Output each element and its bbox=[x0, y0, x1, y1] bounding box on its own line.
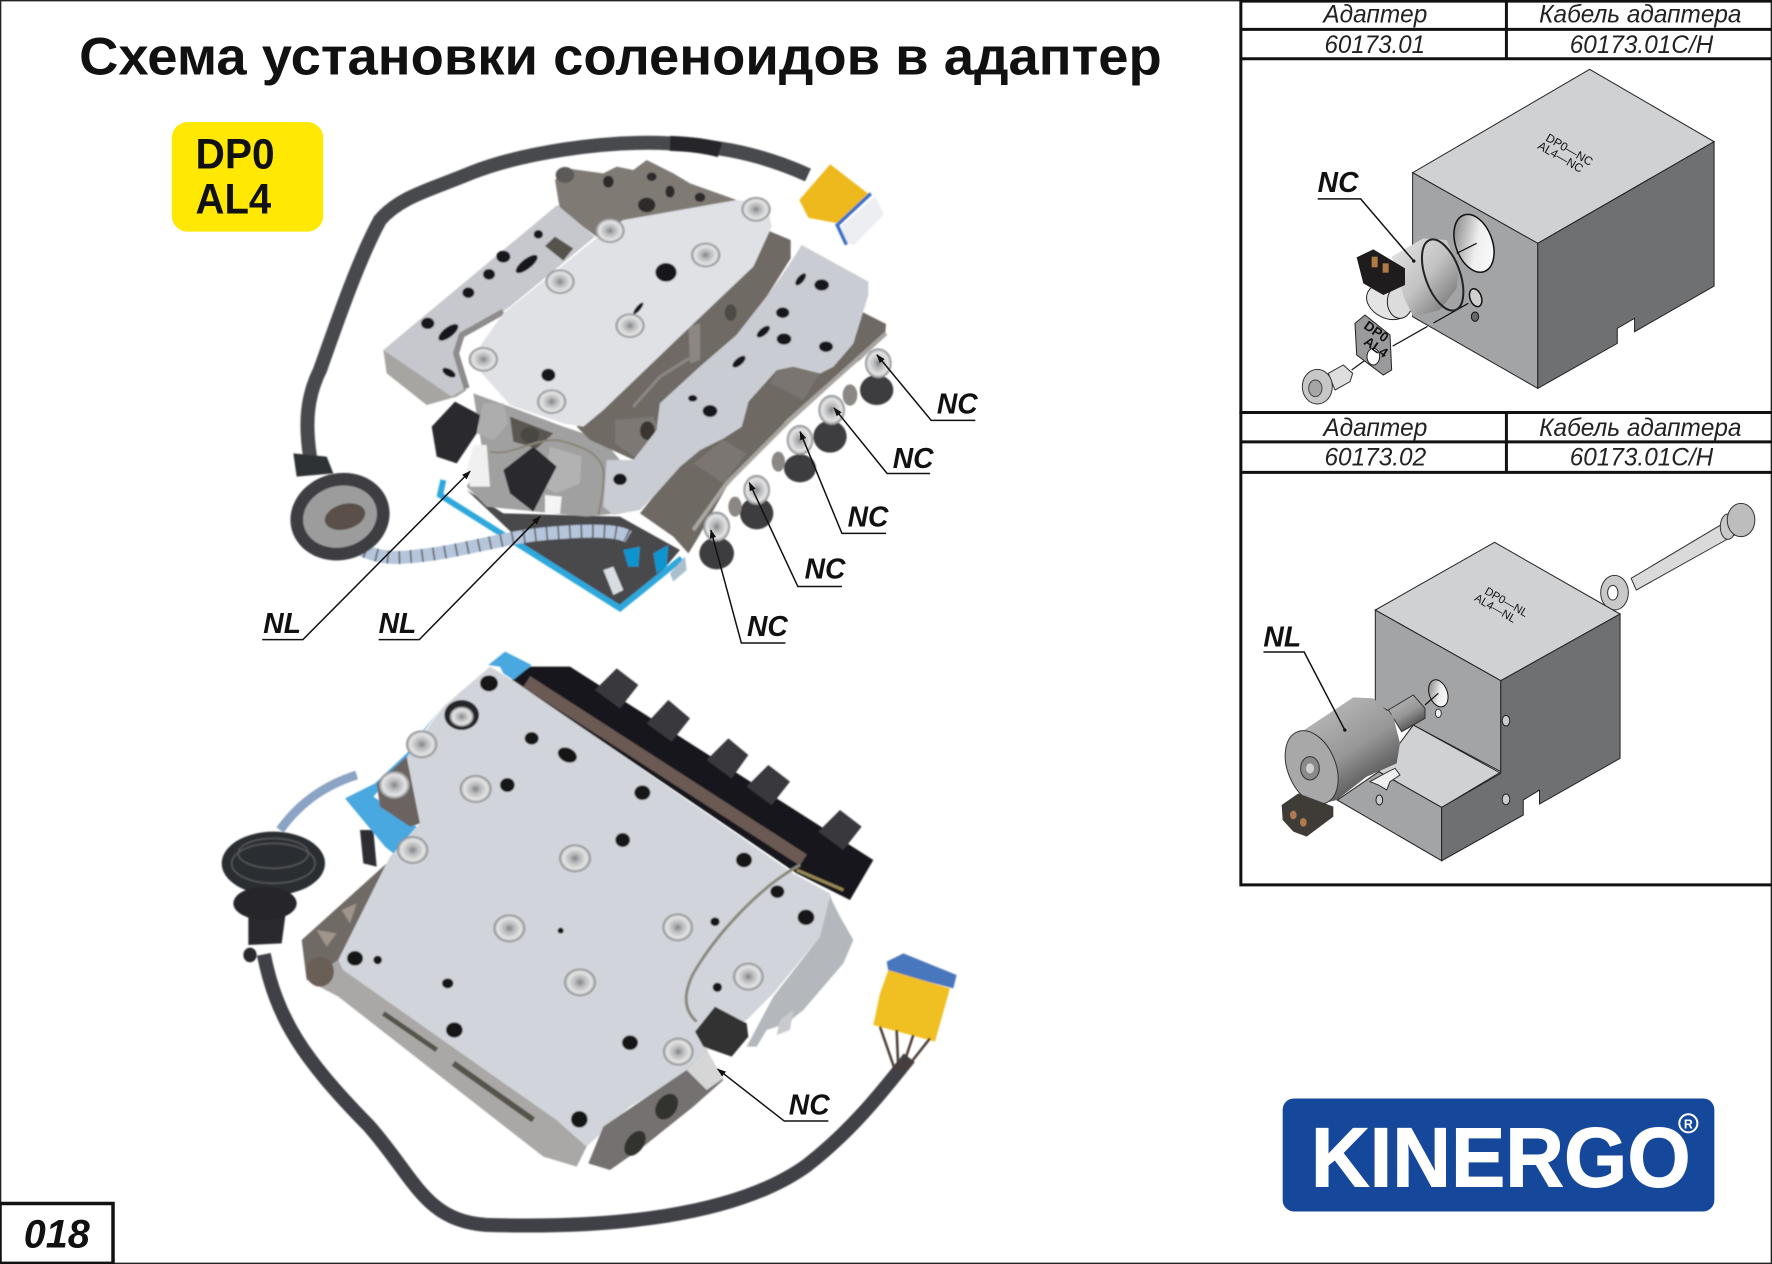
plate bolts bbox=[469, 197, 771, 414]
table: adapter 60173.01: Адаптер bbox=[1321, 1, 1427, 29]
photo: lower valve body assembly bbox=[222, 652, 957, 1226]
harness cable bbox=[307, 143, 808, 457]
NC connector bbox=[695, 1007, 748, 1057]
table: adapter 60173.02 bbox=[1241, 412, 1772, 885]
ledge notch bbox=[1370, 768, 1400, 790]
engraved text on NC block: DP0 bbox=[1361, 318, 1391, 345]
callout NC 4 bbox=[749, 483, 846, 587]
lower right casting bbox=[588, 1050, 723, 1170]
engraved text on NL block: AL4—NL bbox=[1472, 592, 1518, 626]
table: adapter 60173.02: Кабель адаптера bbox=[1539, 414, 1741, 442]
top casting bbox=[555, 160, 737, 237]
callout NC 2 bbox=[834, 408, 934, 474]
bore bbox=[1447, 209, 1501, 278]
page number: 018 bbox=[24, 1213, 90, 1257]
plate bbox=[1355, 315, 1392, 375]
connector blocks bbox=[595, 668, 862, 850]
callout NC 1 bbox=[877, 355, 978, 420]
side casting bbox=[302, 863, 387, 990]
spiral wrapped cable bbox=[345, 531, 628, 558]
table: adapter 60173.02: Адаптер bbox=[1321, 414, 1427, 442]
table: adapter 60173.01: 60173.01 bbox=[1324, 31, 1425, 59]
callout NC 3 bbox=[800, 432, 889, 533]
callout NL 2 bbox=[379, 516, 540, 640]
thin wire bbox=[490, 440, 604, 515]
NC solenoid heads bbox=[703, 348, 892, 542]
grommet bbox=[248, 893, 288, 945]
photo: upper valve body assembly bbox=[280, 143, 893, 608]
engraved text on NC block: AL4—NC bbox=[1535, 139, 1586, 176]
callout NC 1: NC bbox=[937, 388, 978, 420]
callout NL 2: NL bbox=[379, 607, 416, 639]
plate bolts bbox=[379, 707, 764, 1066]
engraved text on NL block: DP0—NL bbox=[1482, 586, 1530, 620]
bore bbox=[1425, 677, 1452, 710]
callout NC 5 bbox=[711, 530, 788, 643]
drawing: adapter NL block bbox=[1275, 503, 1755, 861]
drawing: adapter NC block bbox=[1302, 69, 1714, 404]
callout NC 5: NC bbox=[747, 610, 788, 642]
callout NC on lower photo: NC bbox=[789, 1088, 830, 1120]
lower interior bbox=[467, 490, 680, 605]
callout NL on adapter bbox=[1263, 620, 1347, 732]
plate holes bbox=[347, 675, 814, 1128]
dashed axis bbox=[1352, 303, 1468, 370]
yellow connector bbox=[799, 164, 868, 223]
yellow connector bbox=[887, 953, 957, 988]
connector bbox=[1282, 793, 1333, 837]
callout NL on adapter: NL bbox=[1263, 620, 1301, 652]
solenoid block bbox=[640, 312, 886, 553]
upper plate bbox=[470, 200, 772, 427]
logo: KINERGO: R bbox=[1684, 1117, 1693, 1131]
solenoid NL bbox=[1388, 695, 1425, 732]
badge: DP0 AL4: AL4 bbox=[196, 176, 271, 224]
callout NC 2: NC bbox=[893, 442, 934, 474]
engraved text on NC block bbox=[1361, 131, 1596, 361]
badge: DP0 AL4 bbox=[172, 122, 323, 232]
table: adapter 60173.02: 60173.02 bbox=[1324, 444, 1426, 472]
NL solenoid 1 bbox=[477, 403, 508, 440]
central rib casting bbox=[577, 230, 791, 460]
callout NC on adapter: NC bbox=[1318, 166, 1359, 198]
connector bbox=[1357, 249, 1405, 295]
black connector rail bbox=[512, 667, 873, 900]
page number bbox=[0, 1204, 113, 1263]
badge: DP0 AL4: DP0 bbox=[196, 130, 275, 178]
long bolt and washer bbox=[1631, 522, 1735, 590]
grommet bbox=[293, 453, 333, 477]
solenoid NC bbox=[1361, 277, 1416, 326]
callout NC 3: NC bbox=[848, 501, 889, 533]
table: adapter 60173.01 bbox=[1241, 1, 1772, 412]
main plate bbox=[338, 667, 835, 1147]
callout NC on lower photo bbox=[718, 1069, 830, 1121]
cube bbox=[1413, 69, 1714, 243]
NC connector blobs bbox=[699, 375, 893, 569]
engraved text on NC block: AL4 bbox=[1361, 334, 1391, 361]
side metal strip bbox=[747, 897, 853, 1047]
table: adapter 60173.01: 60173.01C/H bbox=[1570, 31, 1713, 59]
central casting region bbox=[467, 393, 620, 517]
title: Схема установки соленоидов в адаптер bbox=[79, 28, 1162, 87]
callout NL 1 bbox=[262, 471, 470, 640]
callout NL 1: NL bbox=[263, 607, 301, 639]
table: adapter 60173.02: 60173.01C/H bbox=[1570, 444, 1713, 472]
left plate bbox=[383, 350, 467, 405]
engraved text on NC block: DP0—NC bbox=[1543, 131, 1596, 169]
NL solenoid 2 bbox=[543, 447, 582, 493]
table: adapter 60173.01: Кабель адаптера bbox=[1539, 1, 1741, 29]
logo: KINERGO: KINERGO bbox=[1311, 1110, 1691, 1205]
harness cable bbox=[264, 954, 909, 1226]
blue-grey cable bbox=[280, 775, 357, 830]
callouts on upper photo bbox=[262, 355, 978, 643]
blue bracket bbox=[488, 652, 532, 680]
right plate bbox=[603, 245, 868, 515]
stepped block bbox=[1375, 542, 1620, 681]
callout NC 4: NC bbox=[805, 553, 846, 585]
callout NC on adapter bbox=[1318, 166, 1415, 263]
thin loop wire bbox=[686, 865, 800, 1022]
screw bbox=[1328, 365, 1353, 390]
